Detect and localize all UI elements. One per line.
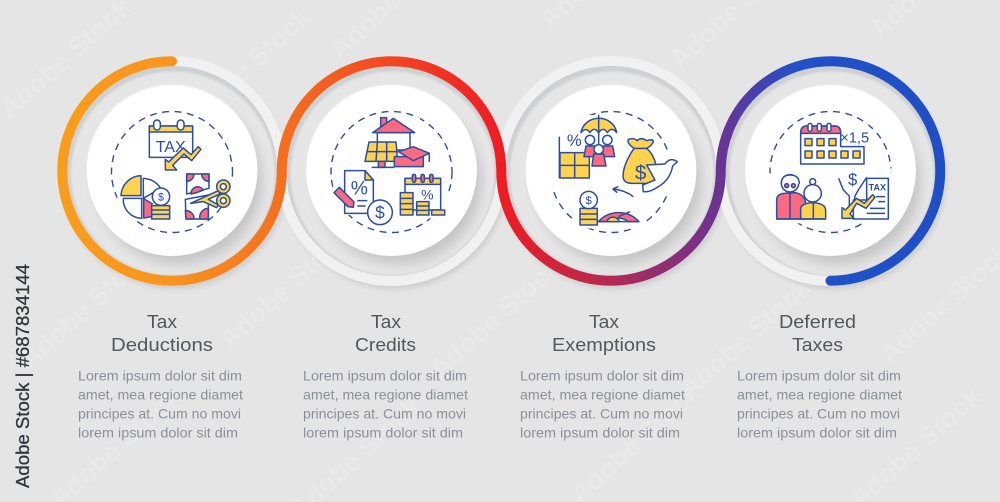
body copy: principes at. Cum no movi bbox=[303, 406, 466, 422]
body copy: lorem ipsum dolor sit dim bbox=[303, 424, 463, 440]
heading: Tax bbox=[147, 311, 178, 332]
body copy bbox=[78, 368, 243, 440]
heading: Credits bbox=[355, 334, 416, 355]
body copy: lorem ipsum dolor sit dim bbox=[737, 424, 897, 440]
continuous gradient ribbon bbox=[62, 61, 940, 281]
icon group: tax credits: $ bbox=[375, 203, 385, 223]
watermark pattern: Adobe Stock bbox=[674, 271, 817, 404]
body copy bbox=[737, 368, 902, 440]
icon group: tax exemptions bbox=[549, 115, 680, 228]
watermark pattern: Adobe Stock bbox=[214, 221, 357, 354]
body copy: Lorem ipsum dolor sit dim bbox=[520, 368, 684, 384]
icon: dashed circle four bbox=[770, 112, 891, 232]
body copy bbox=[303, 368, 468, 440]
heading: Deferred bbox=[779, 311, 856, 332]
icon group: tax credits: % bbox=[421, 186, 434, 202]
body copy: lorem ipsum dolor sit dim bbox=[78, 424, 238, 440]
heading bbox=[355, 311, 416, 355]
body copy: amet, mea regione diamet bbox=[737, 386, 902, 402]
body copy: amet, mea regione diamet bbox=[520, 386, 685, 402]
body copy: amet, mea regione diamet bbox=[303, 386, 468, 402]
icon group: deferred taxes: TAX bbox=[869, 182, 886, 192]
icon group: tax credits bbox=[333, 117, 448, 225]
heading bbox=[779, 311, 856, 355]
column four text bbox=[737, 311, 902, 440]
icon group: tax deductions: $ bbox=[158, 192, 164, 204]
body copy: principes at. Cum no movi bbox=[737, 406, 900, 422]
icon group: deferred taxes: ×1,5 bbox=[840, 131, 869, 147]
icon: dashed circle two bbox=[331, 112, 452, 232]
watermark pattern: Adobe Stock bbox=[174, 1, 317, 134]
heading: Tax bbox=[589, 311, 620, 332]
icon group: tax exemptions: % bbox=[567, 131, 582, 150]
body copy: lorem ipsum dolor sit dim bbox=[520, 424, 680, 440]
icon group: deferred taxes: $ bbox=[848, 170, 857, 189]
heading: Tax bbox=[371, 311, 402, 332]
heading: Deductions bbox=[111, 334, 213, 355]
body copy: principes at. Cum no movi bbox=[78, 406, 241, 422]
icon group: tax credits: % bbox=[351, 178, 368, 199]
icon group: tax exemptions: $ bbox=[586, 195, 593, 207]
body copy: Lorem ipsum dolor sit dim bbox=[737, 368, 901, 384]
column one text bbox=[78, 311, 243, 440]
body copy: Lorem ipsum dolor sit dim bbox=[78, 368, 242, 384]
watermark pattern: Adobe Stock bbox=[424, 251, 567, 384]
icon: dashed circle one bbox=[112, 112, 232, 232]
watermark pattern: Adobe Stock bbox=[14, 241, 157, 374]
body copy: amet, mea regione diamet bbox=[78, 386, 243, 402]
icon group: tax exemptions: $ bbox=[635, 161, 647, 184]
body copy bbox=[520, 368, 685, 440]
column two text bbox=[303, 311, 468, 440]
icon: dashed circle three bbox=[550, 112, 672, 232]
stock credit: Adobe Stock | #687834144 bbox=[13, 264, 33, 488]
icon group: tax deductions: TAX bbox=[156, 139, 186, 156]
icon group: tax deductions bbox=[117, 120, 238, 223]
heading bbox=[111, 311, 213, 355]
body copy: principes at. Cum no movi bbox=[520, 406, 683, 422]
body copy: Lorem ipsum dolor sit dim bbox=[303, 368, 467, 384]
icon group: deferred taxes bbox=[767, 123, 892, 223]
heading bbox=[552, 311, 656, 355]
column three text bbox=[520, 311, 685, 440]
heading: Exemptions bbox=[552, 334, 656, 355]
heading: Taxes bbox=[792, 334, 843, 355]
ring wells and discs bbox=[62, 61, 946, 289]
